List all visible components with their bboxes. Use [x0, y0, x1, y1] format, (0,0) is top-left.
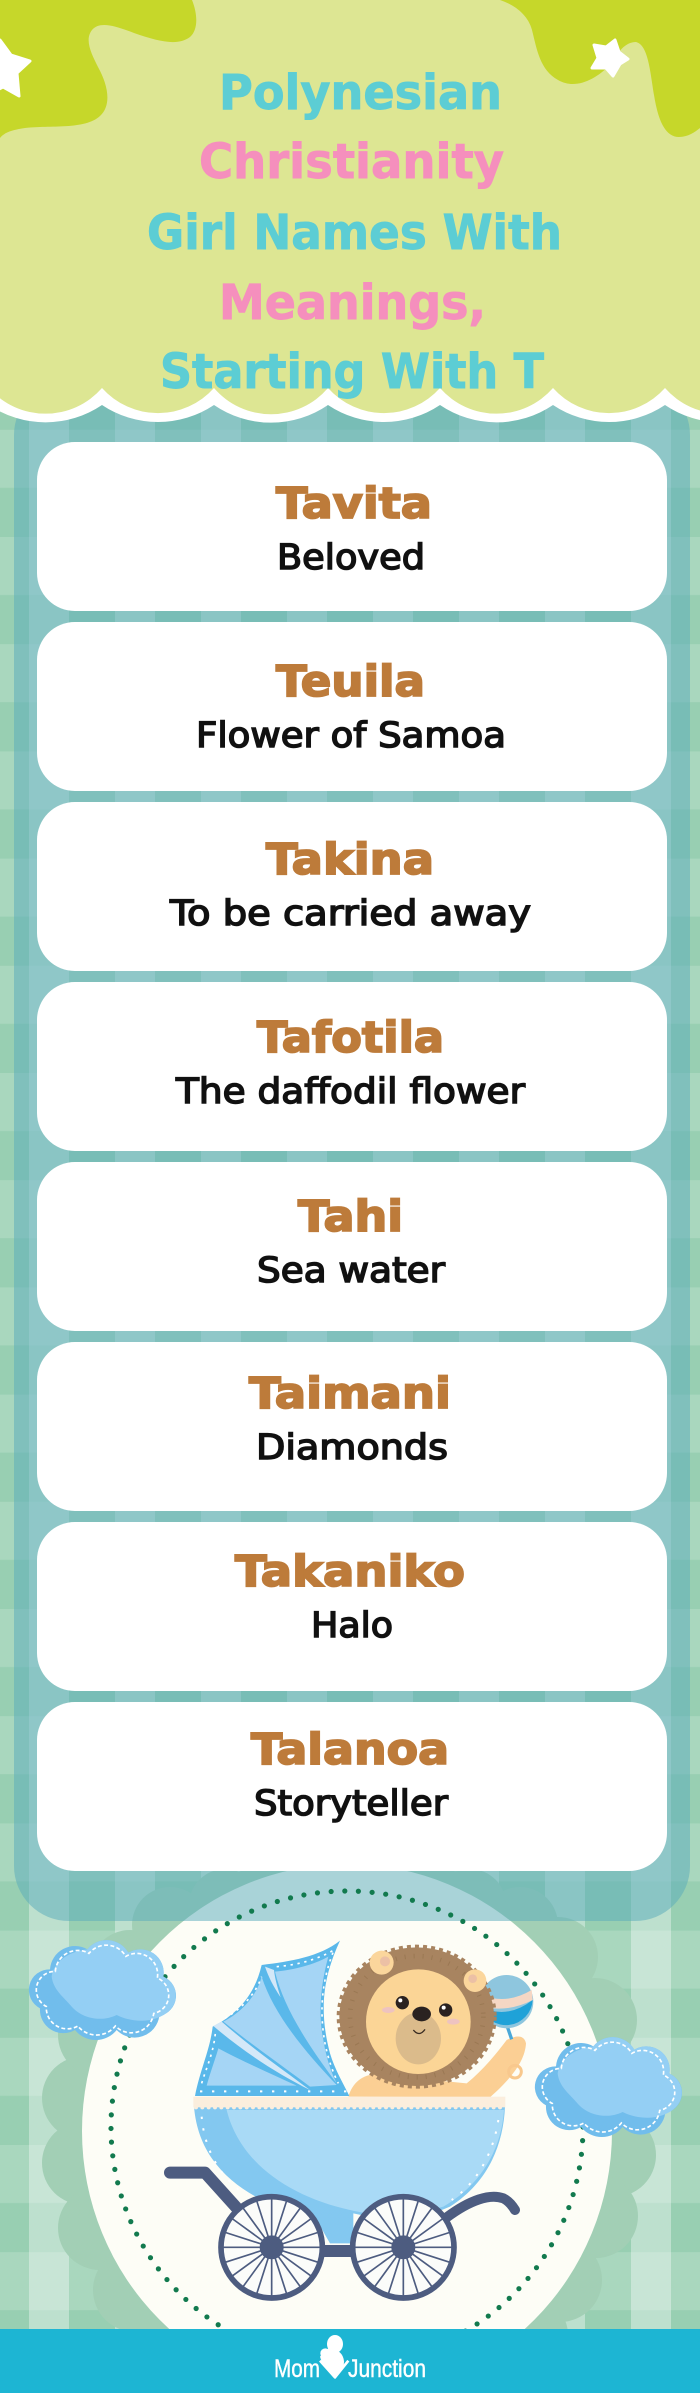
MomJunction logo	[274, 2335, 426, 2383]
card: Takina: To be carried away	[169, 894, 531, 934]
card: Tavita: Tavita	[276, 479, 432, 529]
card: Tafotila: The daffodil flower	[175, 1072, 526, 1112]
icon: right star	[592, 40, 628, 76]
card: Tafotila	[37, 982, 667, 1151]
header banner	[0, 0, 700, 423]
card: Tahi	[37, 1162, 667, 1331]
icon: mother and baby	[320, 2335, 348, 2377]
header left corner blob	[0, 0, 196, 138]
card: Takaniko: Halo	[311, 1606, 393, 1646]
card: Takina	[37, 802, 667, 971]
right handle	[447, 2197, 515, 2217]
stroller hood	[195, 1941, 349, 2096]
title	[147, 65, 562, 400]
footer bar	[0, 2329, 700, 2393]
hand ring	[509, 2065, 521, 2078]
card: Takina: Takina	[266, 835, 434, 885]
wheel axle	[323, 2245, 353, 2257]
card: Teuila	[37, 622, 667, 791]
scalloped green blob behind circle	[42, 1850, 656, 2393]
header light green scallop fill	[0, 0, 700, 414]
MomJunction logo: Mom	[274, 2355, 320, 2383]
card: Tavita: Beloved	[277, 538, 425, 578]
icon: left star	[0, 40, 30, 96]
lion body and arm	[348, 2037, 526, 2097]
teal list panel	[14, 380, 690, 1921]
card: Tafotila: Tafotila	[257, 1013, 444, 1063]
title: Girl Names With	[147, 205, 562, 261]
card: Tahi: Tahi	[298, 1192, 403, 1242]
header right corner blob	[500, 0, 700, 137]
card: Tavita	[37, 442, 667, 611]
stroller bowl	[194, 2107, 505, 2243]
MomJunction logo: Junction	[348, 2355, 426, 2383]
card: Talanoa	[37, 1702, 667, 1871]
card: Takaniko	[37, 1522, 667, 1691]
lion face	[366, 1969, 471, 2074]
card: Tahi: Sea water	[257, 1251, 446, 1291]
card: Talanoa: Storyteller	[254, 1784, 449, 1824]
header white scallop edge	[0, 0, 700, 423]
title: Meanings,	[219, 275, 486, 331]
icon: left cloud	[29, 1940, 176, 2040]
card: Taimani: Taimani	[249, 1369, 451, 1419]
icon: right cloud	[535, 2037, 682, 2137]
lion mane	[339, 1947, 494, 2086]
left handle	[170, 2173, 242, 2213]
stroller lace trim	[193, 2097, 505, 2107]
card: Taimani	[37, 1342, 667, 1511]
card: Takaniko: Takaniko	[235, 1547, 465, 1597]
card: Teuila: Teuila	[276, 657, 425, 707]
dotted circle ring	[111, 1891, 583, 2363]
illustration: lion in baby stroller	[170, 1941, 533, 2298]
white circle	[82, 1864, 612, 2393]
left wheel	[221, 2197, 322, 2298]
rattle	[480, 1975, 533, 2039]
title: Polynesian	[219, 65, 502, 121]
card: Teuila: Flower of Samoa	[196, 716, 506, 756]
right wheel	[353, 2197, 454, 2298]
title: Christianity	[199, 134, 504, 190]
title: Starting With T	[160, 344, 544, 400]
lion ears	[370, 1951, 486, 1992]
card: Talanoa: Talanoa	[251, 1725, 449, 1775]
card: Taimani: Diamonds	[256, 1428, 448, 1468]
